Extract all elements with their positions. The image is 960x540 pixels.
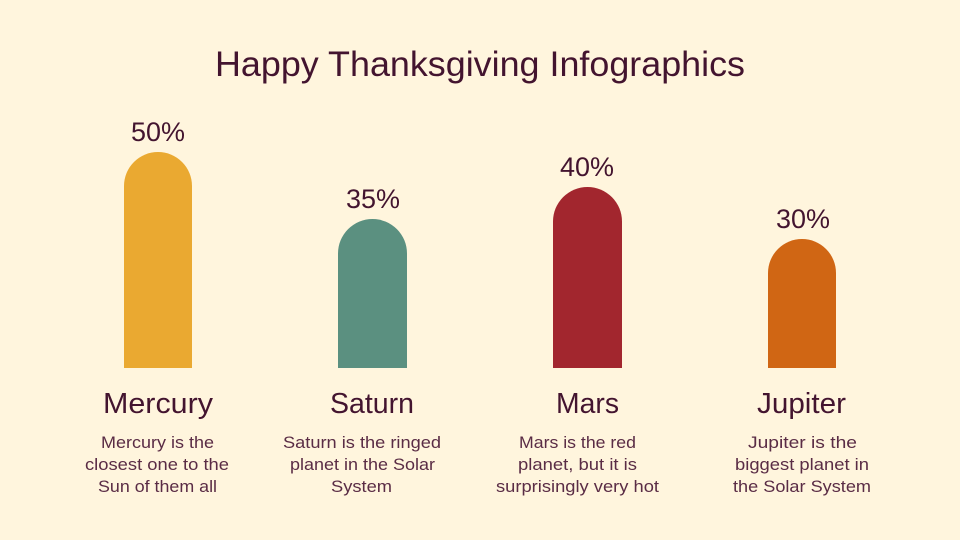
description: Mercury xyxy=(85,433,229,496)
value: Jupiter 30%: 30% xyxy=(776,204,830,234)
description: Mars: surprisingly very hot xyxy=(496,477,659,496)
description: Mars: planet, but it is xyxy=(518,455,637,474)
panel: Saturn xyxy=(283,184,441,496)
description: Mercury: closest one to the xyxy=(85,455,229,474)
description: Jupiter: biggest planet in xyxy=(735,455,869,474)
description: Jupiter: the Solar System xyxy=(733,477,871,496)
description: Saturn xyxy=(283,433,441,496)
description: Jupiter: Jupiter is the xyxy=(748,433,857,452)
description: Saturn: System xyxy=(331,477,392,496)
panel: Mercury xyxy=(85,117,229,496)
panel: Jupiter xyxy=(733,204,871,496)
heading: Jupiter: Jupiter xyxy=(757,388,846,420)
value: Mars 40%: 40% xyxy=(560,152,614,182)
heading: Saturn: Saturn xyxy=(330,388,414,420)
panel: Mars xyxy=(496,152,659,496)
bar: Mercury xyxy=(124,152,192,368)
description: Saturn: planet in the Solar xyxy=(290,455,435,474)
description: Mars xyxy=(496,433,659,496)
bar: Jupiter xyxy=(768,239,836,368)
value: Saturn 35%: 35% xyxy=(346,184,400,214)
title: Happy Thanksgiving Infographics xyxy=(215,45,745,84)
description: Mercury: Mercury is the xyxy=(101,433,214,452)
description: Mars: Mars is the red xyxy=(519,433,636,452)
description: Saturn: Saturn is the ringed xyxy=(283,433,441,452)
description: Mercury: Sun of them all xyxy=(98,477,217,496)
value: Mercury 50%: 50% xyxy=(131,117,185,147)
description: Jupiter xyxy=(733,433,871,496)
bar: Saturn xyxy=(338,219,407,368)
bar: Mars xyxy=(553,187,622,368)
heading: Mercury: Mercury xyxy=(103,388,214,420)
heading: Mars: Mars xyxy=(556,388,619,420)
